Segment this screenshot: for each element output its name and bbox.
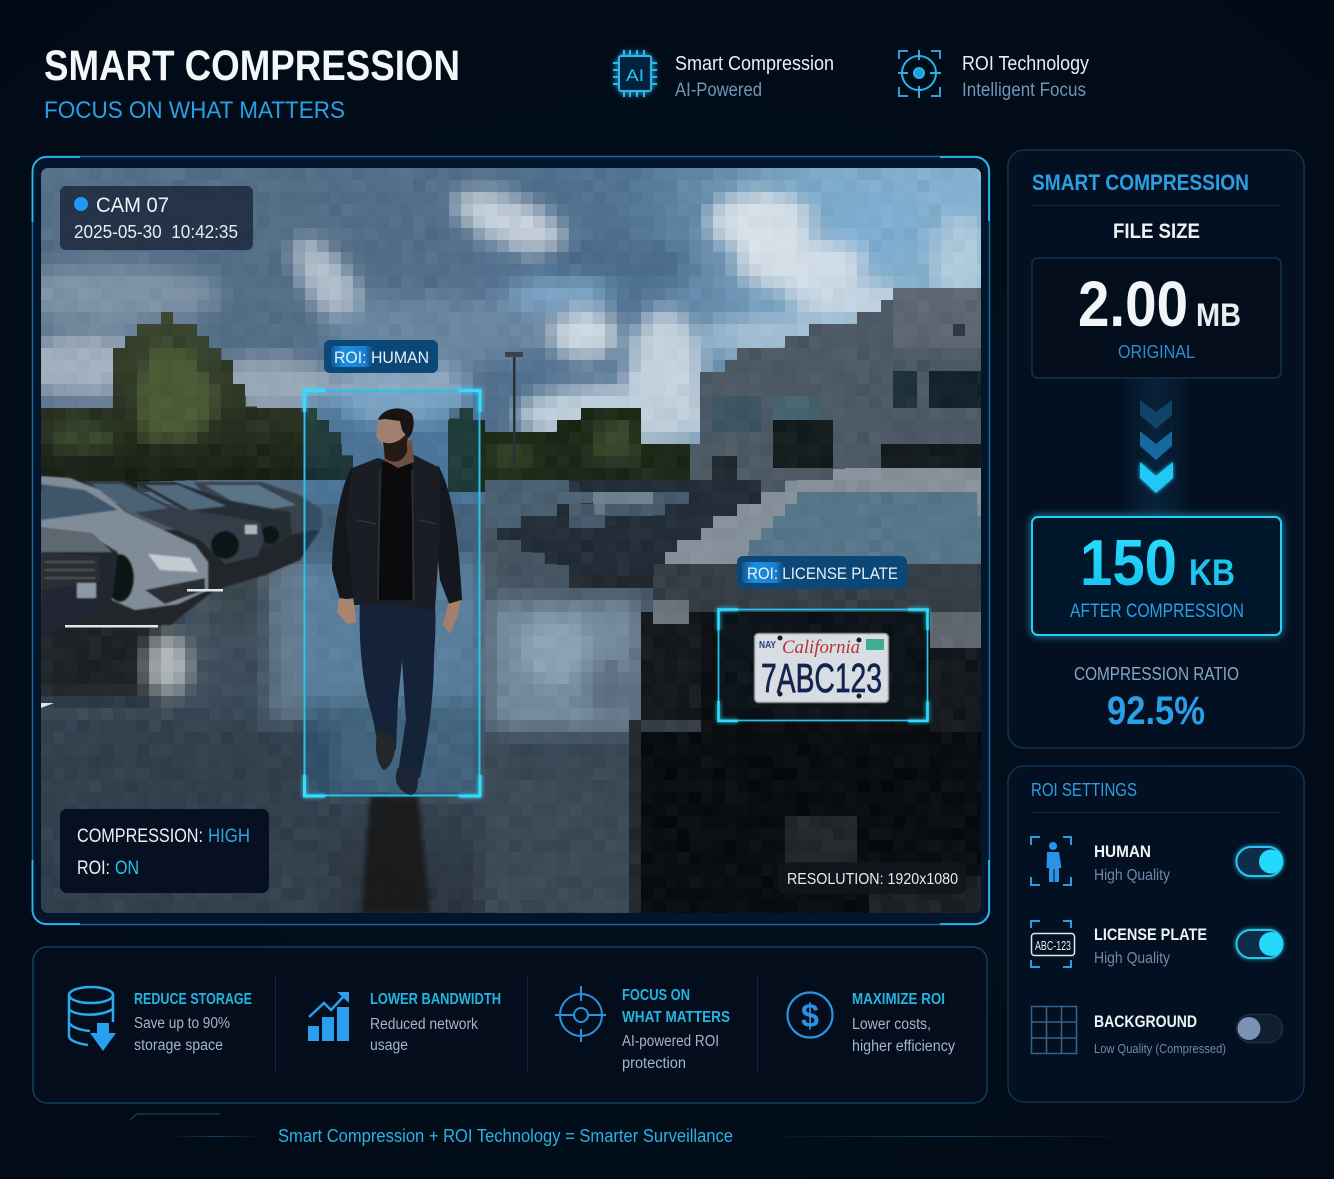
license plate: 7ABC123 xyxy=(761,655,882,701)
benefit: lower bandwidth: Reduced network xyxy=(370,1016,478,1033)
benefit: reduce storage: storage space xyxy=(134,1037,223,1054)
original size card: MB xyxy=(1196,297,1241,333)
overlay: camera id and timestamp: 2025-05-30 10:42:35 xyxy=(74,222,238,242)
overlay: compression status: ROI: xyxy=(77,858,110,879)
icon: grid xyxy=(1032,1006,1076,1054)
icon: database xyxy=(69,987,116,1051)
parking lines xyxy=(41,589,223,708)
legs xyxy=(360,594,436,778)
overlay: compression status: ON xyxy=(115,858,139,879)
person xyxy=(332,408,462,795)
file size label: FILE SIZE xyxy=(1113,220,1200,243)
row: license plate: High Quality xyxy=(1094,950,1170,967)
panel: benefits xyxy=(33,947,987,1103)
icon: dollar: $ xyxy=(801,997,819,1034)
ROI plate box xyxy=(718,610,928,721)
overlay: compression status: HIGH xyxy=(208,826,250,847)
icon: rising bars xyxy=(308,992,349,1041)
building xyxy=(690,300,981,492)
benefit: reduce storage: REDUCE STORAGE xyxy=(134,991,252,1008)
benefit: focus on what matters xyxy=(555,986,730,1072)
trees xyxy=(35,313,700,490)
benefit: focus on what matters: FOCUS ON xyxy=(622,987,690,1004)
header item: ROI technology: Intelligent Focus xyxy=(962,80,1086,101)
header item: smart compression: AI-Powered xyxy=(675,80,762,101)
license plate: California xyxy=(782,637,860,658)
left parked cars xyxy=(41,476,322,635)
right arm and hand xyxy=(438,465,462,604)
tag: ROI human: ROI: HUMAN xyxy=(334,348,429,367)
benefit: lower bandwidth: usage xyxy=(370,1037,408,1054)
original size card: ORIGINAL xyxy=(1118,342,1195,362)
panel heading: SMART COMPRESSION xyxy=(1032,170,1249,195)
benefit: reduce storage xyxy=(69,987,252,1054)
reflection of person xyxy=(362,796,430,913)
benefit: focus on what matters: AI-powered ROI xyxy=(622,1033,719,1050)
row: human: HUMAN xyxy=(1094,842,1151,861)
tag: ROI license plate xyxy=(737,556,907,589)
benefit: focus on what matters: WHAT MATTERS xyxy=(622,1009,730,1026)
overlay: compression status: COMPRESSION: xyxy=(77,826,203,847)
toggle off xyxy=(1236,1014,1282,1042)
compressed size card: 150 xyxy=(1080,526,1177,599)
icon: AI chip xyxy=(613,50,657,97)
overlay: resolution xyxy=(778,862,966,894)
toggle on xyxy=(1236,847,1283,876)
ground xyxy=(41,504,653,913)
icon: ROI target xyxy=(898,50,941,98)
benefit: maximize ROI xyxy=(788,991,955,1055)
header item: ROI technology: ROI Technology xyxy=(962,53,1089,75)
panel: ROI settings xyxy=(1008,766,1304,1102)
benefit: lower bandwidth: LOWER BANDWIDTH xyxy=(370,991,501,1008)
camera image xyxy=(41,168,981,913)
jacket xyxy=(346,455,440,610)
subtitle: FOCUS ON WHAT MATTERS xyxy=(44,97,345,124)
row: human: High Quality xyxy=(1094,867,1170,884)
panel: smart compression xyxy=(1008,150,1304,748)
compressed size card: AFTER COMPRESSION xyxy=(1070,601,1244,622)
icon: plate xyxy=(1031,921,1074,967)
original size card xyxy=(1032,258,1281,378)
overlay: camera id and timestamp xyxy=(60,186,253,250)
compression ratio xyxy=(1074,664,1239,733)
icon: dollar xyxy=(788,992,832,1038)
ROI human box xyxy=(304,390,480,796)
benefit: maximize ROI: MAXIMIZE ROI xyxy=(852,991,945,1008)
pixelated background scene xyxy=(41,168,981,913)
original size card: 2.00 xyxy=(1078,268,1188,340)
row: background xyxy=(1032,1006,1282,1056)
benefit: maximize ROI: higher efficiency xyxy=(852,1038,955,1055)
overlay: compression status xyxy=(60,809,269,893)
benefit: focus on what matters: protection xyxy=(622,1055,686,1072)
compressed size card xyxy=(1032,517,1281,635)
compression ratio: COMPRESSION RATIO xyxy=(1074,664,1239,684)
row: background: Low Quality (Compressed) xyxy=(1094,1042,1226,1056)
row: background: BACKGROUND xyxy=(1094,1012,1197,1031)
benefit: lower bandwidth xyxy=(308,991,501,1054)
overlay: camera id and timestamp: CAM 07 xyxy=(96,194,169,217)
tag: ROI human xyxy=(324,340,438,373)
header item: smart compression xyxy=(675,53,834,101)
benefit: reduce storage: Save up to 90% xyxy=(134,1015,230,1032)
header item: smart compression: Smart Compression xyxy=(675,53,834,75)
mid cars xyxy=(480,483,770,570)
neck and face xyxy=(384,440,414,468)
panel: camera frame xyxy=(32,156,990,924)
title: SMART COMPRESSION xyxy=(44,42,460,90)
benefit: maximize ROI: Lower costs, xyxy=(852,1016,931,1033)
panel heading: ROI SETTINGS xyxy=(1031,780,1137,800)
right dark pavement xyxy=(641,732,981,913)
shoes xyxy=(376,729,395,770)
toggle on xyxy=(1236,930,1283,958)
compressed size card: KB xyxy=(1189,552,1235,593)
tag: ROI license plate: ROI: LICENSE PLATE xyxy=(747,564,898,583)
row: license plate: LICENSE PLATE xyxy=(1094,925,1207,944)
t-shirt xyxy=(378,462,412,600)
icon: crosshair xyxy=(555,986,606,1042)
icon: AI chip: AI xyxy=(626,66,644,85)
compression ratio: 92.5% xyxy=(1107,689,1205,733)
arrow: compress chevrons xyxy=(1124,379,1188,516)
license plate xyxy=(754,634,888,702)
footer tagline: Smart Compression + ROI Technology = Smarter Surveillance xyxy=(278,1126,733,1146)
license plate: NAY xyxy=(759,640,776,651)
overlay: resolution: RESOLUTION: 1920x1080 xyxy=(787,871,958,888)
dark band under cars xyxy=(41,530,320,625)
row: license plate xyxy=(1031,921,1283,967)
lamp post xyxy=(505,352,523,471)
front car windshield and roof xyxy=(640,470,1000,560)
row: human xyxy=(1031,837,1283,885)
header item: ROI technology xyxy=(962,53,1089,101)
left arm and hand xyxy=(332,467,354,599)
icon: plate: ABC-123 xyxy=(1035,939,1071,953)
icon: person xyxy=(1031,837,1071,885)
